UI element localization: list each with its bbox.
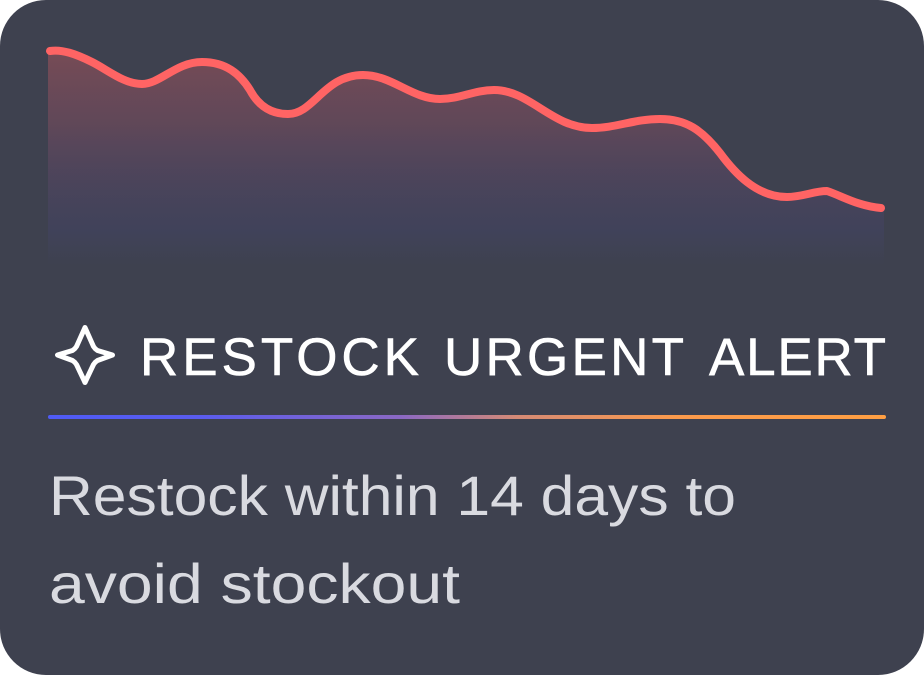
heading word 1: RESTOCK bbox=[140, 328, 419, 387]
heading word 3: ALERT bbox=[709, 328, 886, 387]
chart area fill bbox=[48, 51, 884, 265]
icon: four-point sparkle bbox=[58, 328, 112, 382]
body line 1: Restock within 14 days to bbox=[49, 464, 736, 527]
body text bbox=[49, 464, 736, 615]
heading bbox=[140, 328, 886, 387]
heading word 2: URGENT bbox=[444, 328, 684, 387]
gradient divider bbox=[48, 415, 886, 419]
chart: declining stock area bbox=[48, 51, 884, 265]
chart trend line bbox=[50, 51, 881, 208]
body line 2: avoid stockout bbox=[49, 552, 461, 615]
